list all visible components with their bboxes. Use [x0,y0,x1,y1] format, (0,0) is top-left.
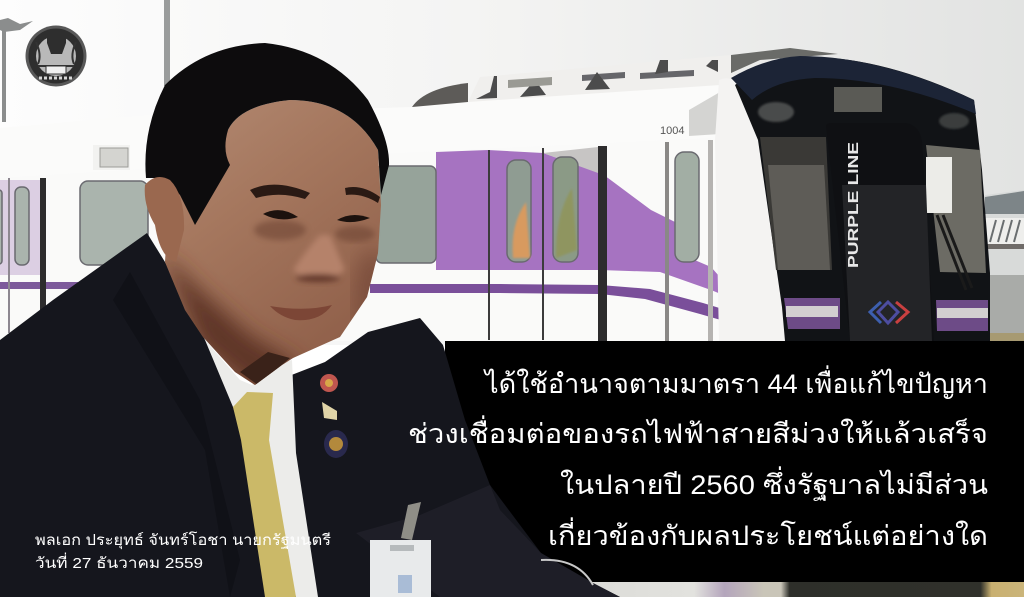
man: neck shadow [240,352,290,385]
black text panel [445,341,1024,582]
man: lapel pins [320,374,348,458]
train: grey door top [543,147,598,173]
man: sleeve fold [356,485,620,597]
train: side body [0,48,838,341]
train: dark navy top cap [731,56,976,114]
statement text: ช่วงเชื่อมต่อของรถไฟฟ้าสายสีม่วงให้แล้วเสร็จ [408,415,988,449]
background: terminal building [985,190,1024,341]
train: panel and number 1004: 1004 [660,125,684,137]
caption: name and date: พลเอก ประยุทธ์ จันทร์โอชา นายกรัฐมนตรี [35,531,331,550]
man: ear [145,177,184,262]
train: left windscreen [760,137,832,270]
train: panel and number 1004 [93,92,720,170]
man: microphone arm [541,560,593,585]
train: purple livery [436,150,743,303]
man: suit jacket [0,233,620,597]
man: face and neck [165,100,381,385]
man: tie [233,392,296,597]
background: lamp posts [0,0,170,122]
man: nose [293,235,345,282]
train: purple lines [0,282,752,327]
statement text: ได้ใช้อำนาจตามมาตรา 44 เพื่อแก้ไขปัญหา [483,365,988,399]
train: destination display [834,87,882,112]
train: windows [0,152,699,265]
government seal [26,26,86,86]
train: roof equipment [412,48,838,107]
man: jaw and neck shading [165,254,299,385]
train: right windscreen [926,145,986,273]
man: jacket lapel crease [113,272,240,597]
bottom blurred strip [590,582,1024,597]
train: passengers in window [513,188,577,258]
man: right eyebrow [345,187,380,203]
man: eye bags [254,220,375,242]
man: left eyebrow [250,185,310,199]
man: hair [145,43,389,225]
train: wiper [937,215,972,290]
train: black cab front [731,56,990,341]
train: front door [826,123,934,341]
train: door frames [8,140,713,341]
man: shirt collar [205,340,318,597]
man: portrait [0,43,620,597]
man: mouth [270,305,332,320]
train: PURPLE LINE label: PURPLE LINE [845,142,862,268]
man: left eye [263,210,298,219]
train: headlights [758,102,969,129]
caption: name and date [35,531,331,572]
man: id badge [370,502,431,597]
train: front stripes left [784,298,840,329]
train: logo [870,302,908,323]
man: cheek shade right [350,250,378,322]
train: white nose [715,78,785,341]
statement text: เกี่ยวข้องกับผลประโยชน์แต่อย่างใด [548,517,988,551]
statement text [408,365,988,551]
train: front stripes right [936,300,988,331]
statement text: ในปลายปี 2560 ซึ่งรัฐบาลไม่มีส่วน [560,466,988,501]
caption: name and date: วันที่ 27 ธันวาคม 2559 [35,552,203,572]
train: left door tint [0,180,40,275]
train: lower side [0,138,722,341]
man: right eye [337,215,370,222]
background: sky [0,0,1024,345]
